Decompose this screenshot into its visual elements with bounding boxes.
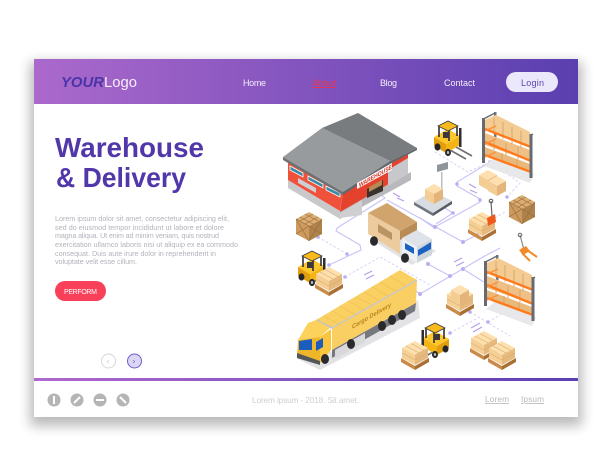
connector network [316,152,520,336]
navigation: Blog [380,78,397,88]
login button: Login [521,78,544,88]
weighing scale [414,162,452,216]
body text: sed do eiusmod tempor incididunt ut labore et dolore [55,223,224,232]
logo: YOUR [61,75,105,91]
social icons [48,394,130,406]
trailer [316,270,417,328]
body text: voluptate velit esse cillum. [55,257,137,266]
cab [298,320,330,340]
boxes on floor [479,170,506,196]
pallet rack bottom [484,255,536,326]
van cab [402,230,432,247]
body text: exercitation ullamco laboris nisi ut aliquip ex ea commodo [55,240,238,249]
footer copyright: Lorem ipsum - 2018. Sit amet. [252,395,359,405]
forklift top [434,121,472,159]
heading: & Delivery [56,162,186,193]
page card [34,59,578,417]
body text: magna aliqua. Ut enim ad minim veniam, quis nostrud [55,231,219,240]
pallet stack centre upper layer [451,285,469,305]
warehouse sign: WAREHOUSE [359,164,392,189]
warehouse base and walls [288,153,411,219]
trailer chassis [332,303,416,358]
footer links: Lorem [485,394,509,404]
body text: Lorem ipsum dolor sit amet, consectetur adipiscing elit, [55,214,229,223]
navigation: Contact [444,78,475,88]
carousel arrows: ‹ [107,358,110,366]
orange pallet jack [518,233,537,261]
pallet rack top [482,112,534,183]
crate right [509,195,535,224]
truck wheels [321,310,406,364]
carousel arrows: › [133,358,136,366]
navigation: About [311,78,336,88]
heading [55,132,204,193]
side door panel [298,178,316,193]
van wheels [370,236,378,246]
trailer lettering: Cargo Delivery [352,301,391,331]
header bar [34,59,578,104]
navigation [243,78,475,88]
pallet stack centre [446,287,474,316]
crate left [296,212,322,241]
perform button [55,281,106,301]
small pallet with jack [468,199,496,241]
heading: Warehouse [55,132,204,163]
perform button: PERFORM [64,289,97,296]
body text [55,214,238,266]
footer links [485,394,544,404]
windows [290,166,340,197]
logo [61,75,137,91]
footer links: Ipsum [521,394,544,404]
cargo truck [296,270,420,370]
roof [283,128,390,192]
navigation: Home [243,78,266,88]
logo: Logo [104,75,137,91]
van cargo box [368,203,417,231]
login button [506,72,558,92]
footer divider [34,378,578,381]
body text: consequat. Duis aute irure dolor in reprehenderit in [55,249,216,258]
carousel arrows [102,354,142,368]
forklift bottom with pallet [401,323,449,370]
loading door [367,180,383,198]
warehouse [283,113,417,219]
delivery van [368,203,436,265]
forklift left with pallet [298,251,343,296]
two pallets [470,331,516,370]
isometric illustration [283,112,537,370]
card drop shadow [30,62,582,426]
